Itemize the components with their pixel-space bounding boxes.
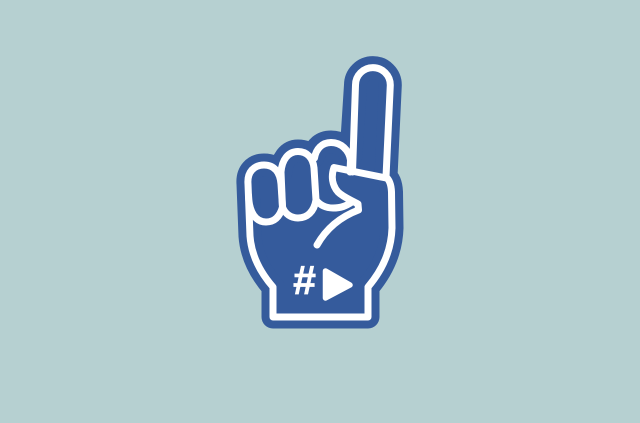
thumb xyxy=(317,168,386,245)
finger lines xyxy=(248,152,352,222)
icon: play triangle xyxy=(326,271,350,298)
blue silhouette with halo xyxy=(248,68,392,317)
white outline xyxy=(248,68,392,317)
hashtag: # xyxy=(293,257,316,303)
foam finger xyxy=(248,68,392,317)
